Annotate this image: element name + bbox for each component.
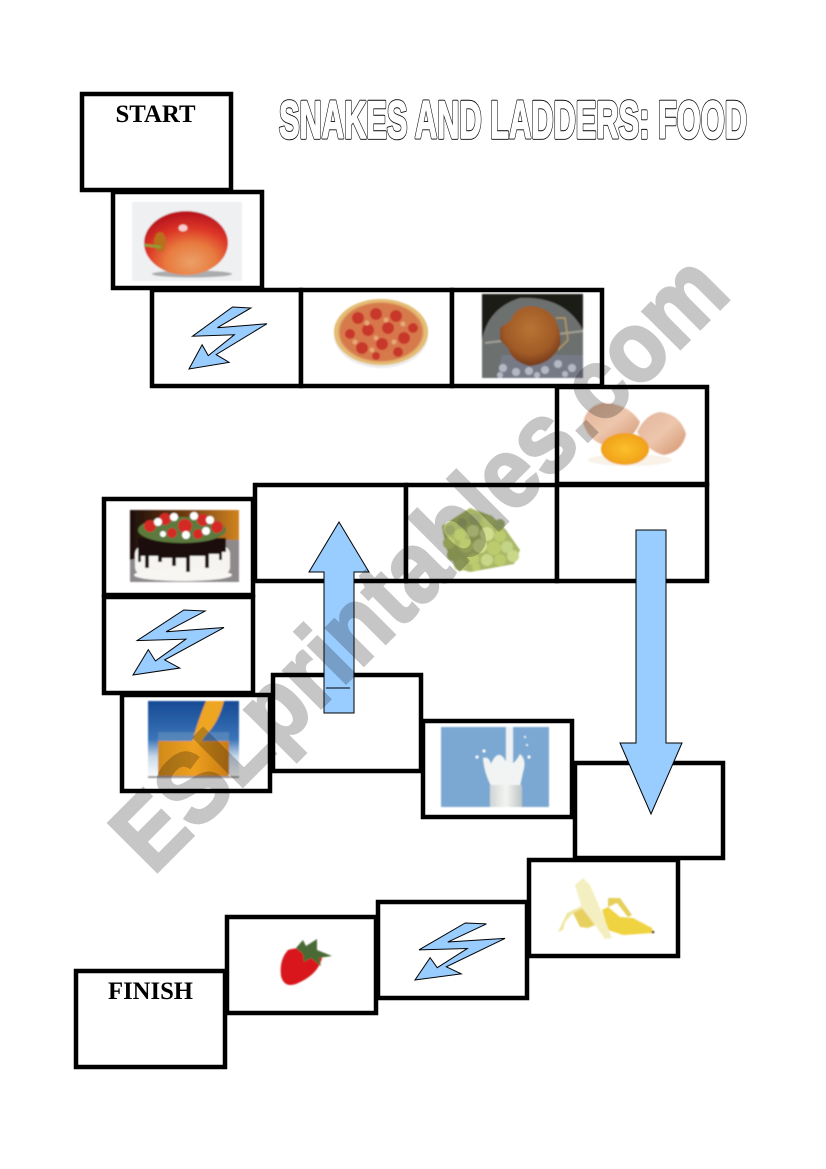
icon: cake	[130, 510, 239, 582]
square: banana	[529, 860, 678, 956]
square: start: START	[116, 101, 196, 128]
icon: strawberry	[281, 939, 332, 985]
square: blank middle	[273, 675, 421, 771]
square: egg	[557, 387, 707, 484]
square: finish: FINISH	[108, 978, 194, 1005]
square: blank upper left	[255, 485, 406, 581]
icon: chicken	[482, 294, 583, 378]
square: grapes	[406, 485, 557, 581]
icon: apple	[132, 202, 242, 281]
arrow: ladder up	[309, 522, 369, 713]
square: blank lower right	[575, 763, 723, 858]
square: pizza	[301, 290, 452, 386]
icon: bolt 3	[415, 923, 505, 980]
square: bolt 1	[152, 290, 301, 386]
square: chicken	[452, 290, 602, 386]
icon: grapes	[442, 508, 520, 572]
square: milk	[423, 721, 572, 817]
icon: banana	[558, 878, 654, 939]
square: blank upper right	[557, 485, 707, 581]
square: bolt 2	[104, 597, 253, 693]
arrow: ladder down	[620, 530, 682, 814]
icon: bolt 1	[189, 307, 267, 369]
icon: juice	[148, 701, 239, 778]
watermark: ESLprintables.com	[89, 233, 748, 892]
icon: egg	[583, 403, 686, 466]
square: cake	[104, 499, 253, 595]
square: juice	[122, 695, 270, 791]
icon: bolt 2	[133, 610, 224, 675]
icon: milk	[441, 727, 549, 807]
square: strawberry	[227, 917, 376, 1013]
board squares	[76, 94, 723, 1067]
square: finish	[76, 971, 225, 1067]
square: start	[82, 94, 231, 190]
square: apple	[113, 192, 262, 288]
square: bolt 3	[378, 902, 527, 998]
icon: pizza	[334, 299, 428, 368]
